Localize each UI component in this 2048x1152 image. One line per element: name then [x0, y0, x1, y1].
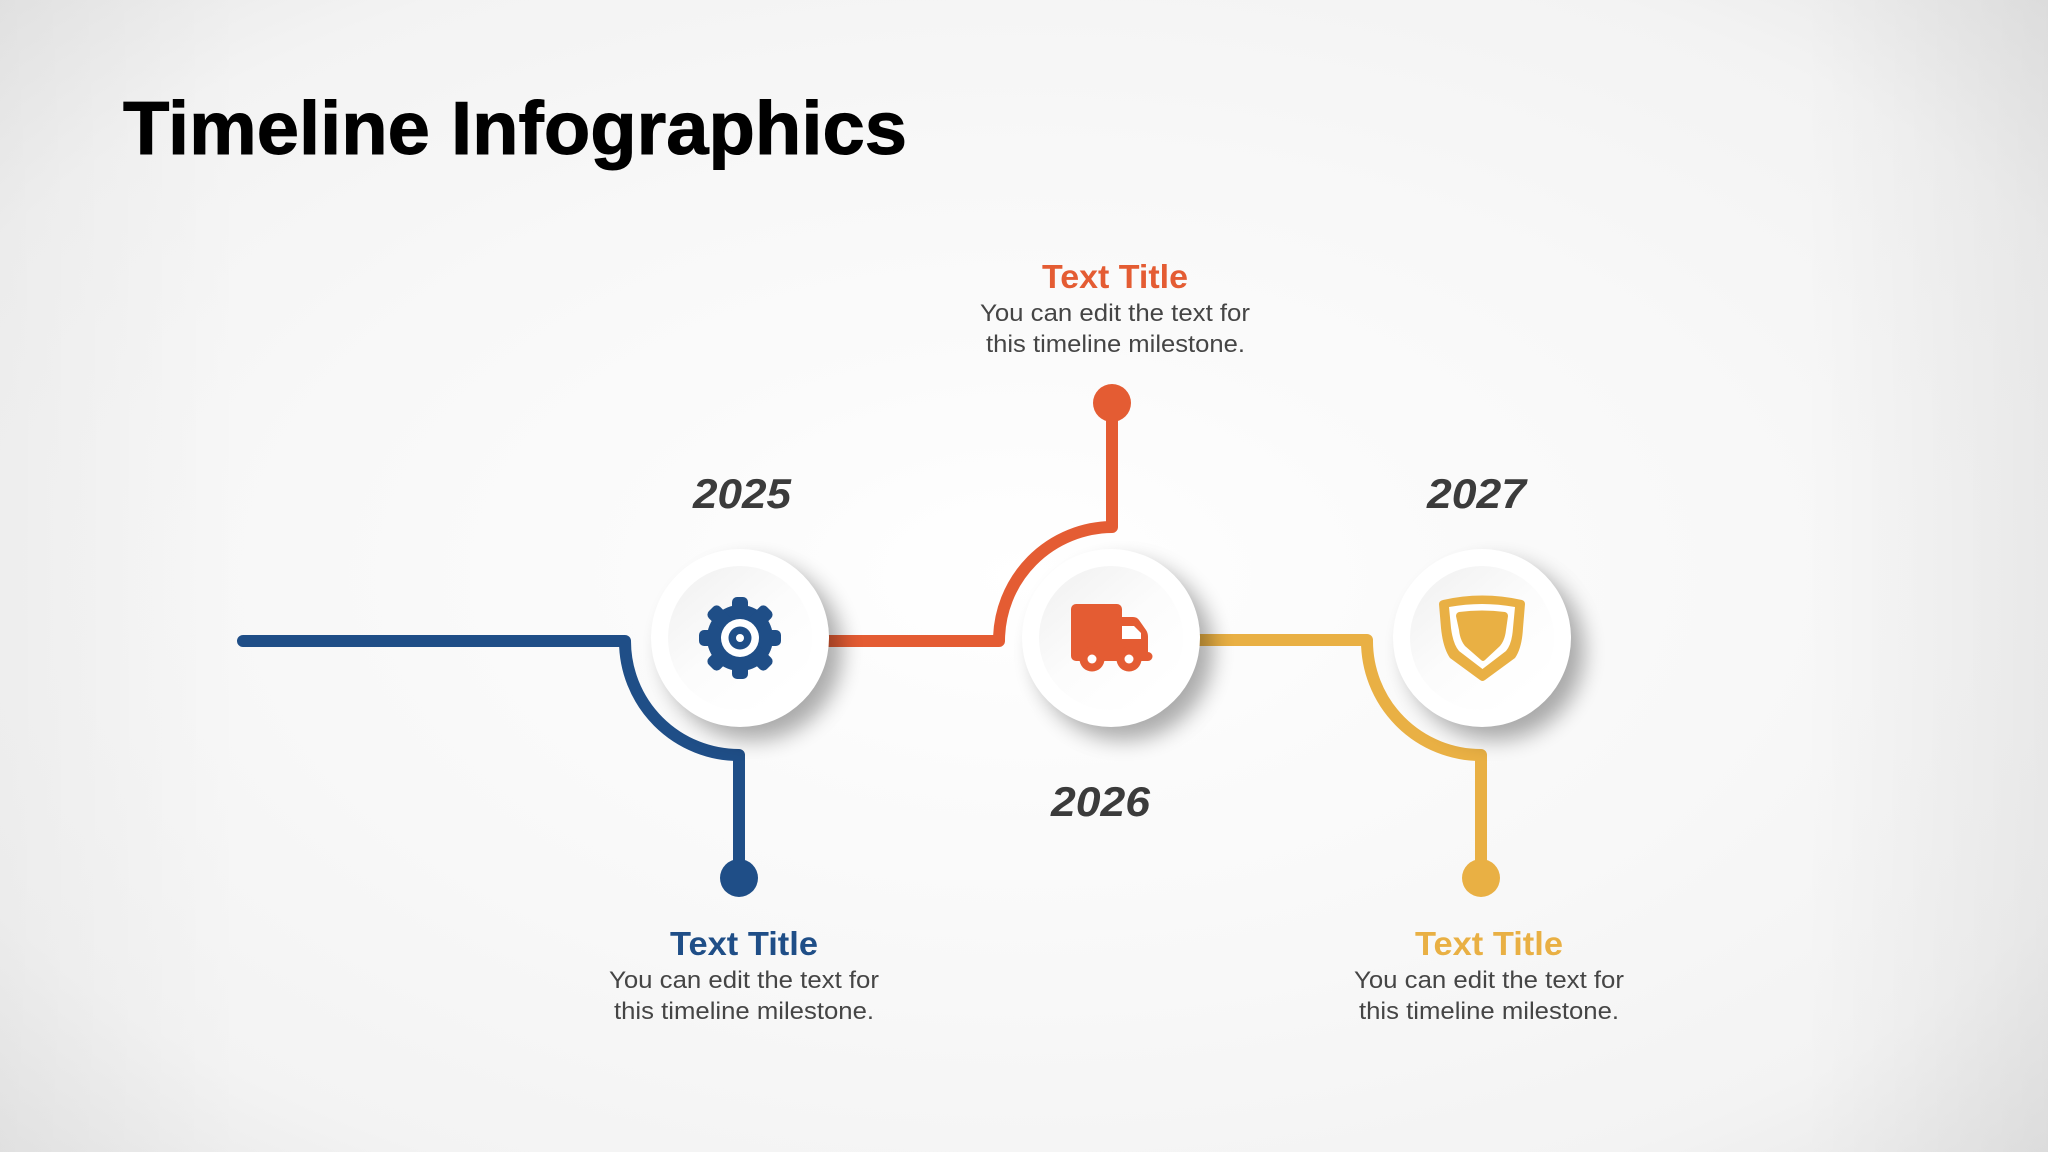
year 2027: 2027: [1426, 470, 1528, 517]
text block: blue milestone: Text Title: [670, 925, 818, 962]
milestone circle 2025: [651, 549, 842, 740]
milestone circle 2026: [1022, 549, 1213, 740]
text block: yellow milestone: Text Title: [1415, 925, 1563, 962]
text block: yellow milestone: [1354, 925, 1624, 1025]
icon: gear: [699, 597, 781, 679]
text block: blue milestone: [609, 925, 879, 1025]
icon: shield: [1439, 596, 1525, 681]
year 2025: 2025: [692, 470, 792, 517]
title: Timeline Infographics: [123, 86, 907, 170]
text block: blue milestone: this timeline milestone.: [614, 998, 874, 1025]
yellow timeline connector: [1190, 640, 1500, 897]
icon: truck: [1071, 604, 1152, 672]
text block: orange milestone: this timeline milestone.: [986, 331, 1245, 358]
text block: orange milestone: [980, 258, 1250, 358]
text block: blue milestone: You can edit the text for: [609, 967, 879, 994]
text block: yellow milestone: You can edit the text for: [1354, 967, 1624, 994]
orange timeline connector: [820, 384, 1131, 641]
text block: yellow milestone: this timeline milestone.: [1359, 998, 1619, 1025]
milestone circle 2027: [1393, 549, 1584, 740]
year 2026: 2026: [1050, 778, 1151, 825]
text block: orange milestone: You can edit the text for: [980, 300, 1250, 327]
text block: orange milestone: Text Title: [1042, 258, 1188, 295]
blue timeline connector: [243, 641, 758, 897]
